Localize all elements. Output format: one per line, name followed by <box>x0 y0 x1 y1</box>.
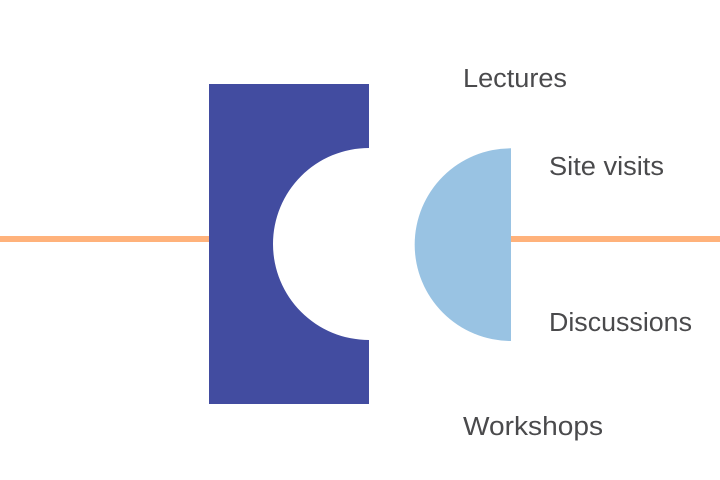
label: Workshops: Workshops <box>463 413 603 441</box>
light blue semicircle <box>415 148 511 341</box>
label: Discussions: Discussions <box>549 309 692 337</box>
dark blue rectangle with semicircular cutout <box>209 84 369 404</box>
label: Site visits: Site visits <box>549 153 664 181</box>
label: Lectures: Lectures <box>463 65 567 93</box>
orange line: left segment <box>0 236 209 242</box>
orange line: right segment <box>511 236 720 242</box>
